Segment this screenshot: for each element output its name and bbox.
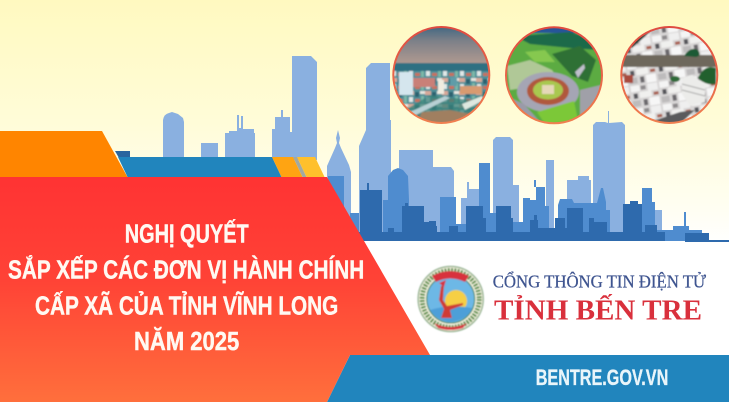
title line 4: NĂM 2025 bbox=[134, 326, 239, 356]
title line 2: SẮP XẾP CÁC ĐƠN VỊ HÀNH CHÍNH bbox=[8, 255, 364, 285]
photo circle: dense urban aerial view bbox=[620, 26, 718, 124]
title line 1: NGHỊ QUYẾT bbox=[125, 219, 249, 249]
icon: Bến Tre emblem bbox=[418, 266, 483, 332]
title bbox=[8, 219, 364, 356]
title line 3: CẤP XÃ CỦA TỈNH VĨNH LONG bbox=[35, 290, 338, 321]
skyline: dark buildings bbox=[358, 183, 729, 242]
amber ribbon bbox=[272, 157, 303, 178]
skyline: light buildings bbox=[163, 56, 662, 241]
portal name heading: CỔNG THÔNG TIN ĐIỆN TỬ bbox=[493, 272, 706, 292]
orange ribbon bbox=[0, 131, 128, 178]
blue ribbon bbox=[118, 157, 282, 178]
grey ribbon sliver bbox=[293, 157, 307, 178]
province name heading: TỈNH BẾN TRE bbox=[494, 293, 702, 327]
dark blue ribbon tab bbox=[115, 151, 130, 158]
skyline: medium buildings bbox=[328, 163, 702, 241]
photo circle: roundabout and green park bbox=[505, 26, 603, 124]
background gradient bbox=[0, 0, 729, 245]
blue footer band bbox=[327, 355, 729, 402]
yellow ribbon bbox=[297, 157, 325, 178]
red title panel bbox=[0, 177, 430, 402]
skyline illustration bbox=[163, 56, 729, 242]
photo circle: riverside city at dusk bbox=[392, 26, 490, 124]
website address: BENTRE.GOV.VN bbox=[536, 365, 668, 390]
